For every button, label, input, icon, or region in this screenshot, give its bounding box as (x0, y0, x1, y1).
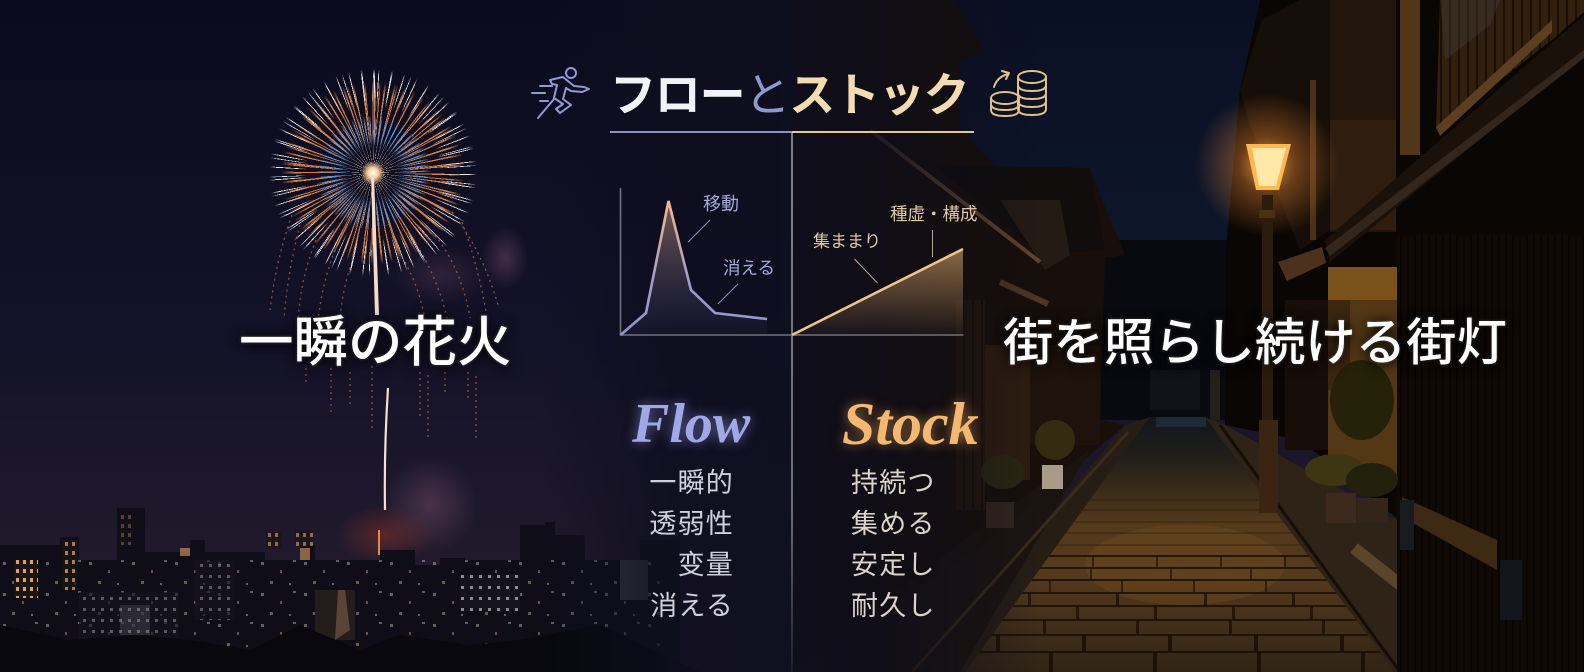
rocket trails (385, 388, 388, 510)
flow script label: Flow (632, 393, 750, 455)
center divider (791, 132, 792, 672)
flow chart (620, 188, 791, 336)
flow word list: 变量 (678, 550, 734, 580)
title: フローとストック (610, 69, 968, 121)
potted plants right (1305, 360, 1398, 523)
city skyline (0, 508, 700, 672)
flow word list: 消える (650, 591, 734, 621)
stock chart (792, 230, 964, 336)
left sky effects (382, 457, 478, 553)
stock chart label: 集ままり: 集ままり (813, 232, 881, 251)
core glow (361, 161, 385, 185)
icon: running person (531, 67, 590, 119)
blue ring (316, 116, 430, 230)
core rays (340, 140, 406, 206)
stock word list: 集める (851, 509, 936, 539)
flow chart label: 消える: 消える (723, 258, 775, 278)
potted plants left (981, 420, 1075, 528)
flow word list (649, 468, 734, 621)
stone road (966, 370, 1397, 672)
stock word list (851, 468, 936, 621)
stock word list: 安定し (851, 550, 936, 580)
left street houses (792, 0, 1150, 672)
flow chart label: 移動: 移動 (703, 194, 739, 214)
stock script label: Stock (842, 391, 979, 457)
flow word list: 透弱性 (649, 509, 734, 539)
firework burst (270, 70, 476, 276)
white ray tips (270, 70, 476, 276)
firework trail (371, 175, 379, 315)
orange rays (282, 82, 464, 264)
street lamp (1195, 93, 1339, 513)
far alley buildings (1085, 240, 1235, 420)
stock word list: 持続つ (851, 468, 936, 498)
icon: coin stacks (990, 70, 1047, 117)
stock word list: 耐久し (851, 591, 936, 621)
stock chart label: 種虚・構成: 種虚・構成 (890, 204, 978, 224)
heading: street lamp: 街を照らし続ける街灯 (1003, 314, 1507, 371)
flow word list: 一瞬的 (649, 468, 734, 498)
falling sparks (270, 212, 498, 440)
center darkening overlay (540, 0, 1040, 672)
right machiya building (1225, 0, 1584, 672)
title underline (610, 131, 974, 133)
heading: fireworks: 一瞬の花火 (239, 312, 512, 373)
